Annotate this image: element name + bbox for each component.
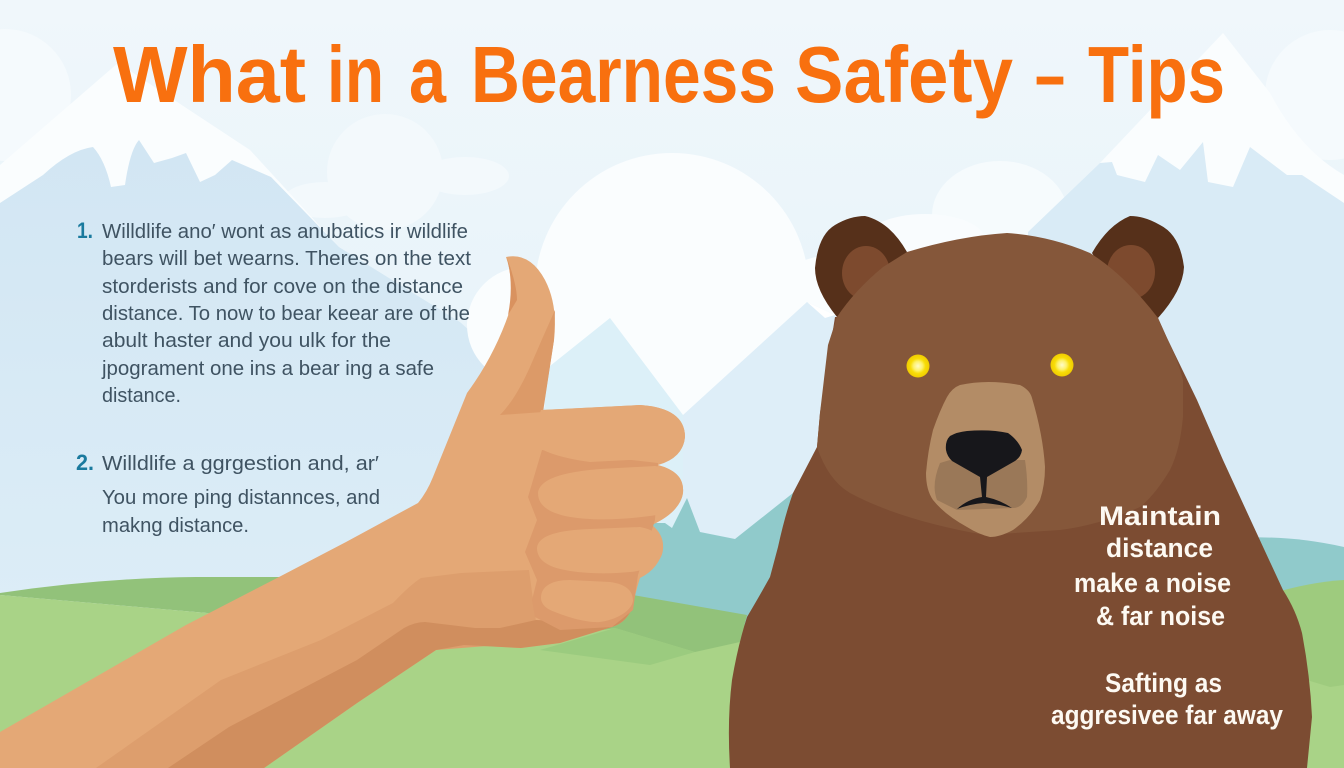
title [113, 30, 1225, 119]
title: Bearness [471, 30, 776, 119]
lower muzzle shade [935, 460, 1027, 510]
title: Tips [1088, 30, 1225, 119]
tip 1 text block: distance. [102, 384, 181, 407]
bear callout text: maintain distance: distance [1106, 533, 1213, 563]
tip 1 text block: distance. To now to bear keear are of the [102, 302, 470, 325]
title: – [1035, 30, 1065, 119]
tip 1 text block: Willdlife ano′ wont as anubatics ir wildlife [102, 220, 468, 243]
title: What [113, 30, 306, 119]
bear body [729, 317, 1312, 768]
bear callout text: safting: aggresivee far away [1051, 700, 1283, 730]
tip 1 text block: jpograment one ins a bear ing a safe [101, 357, 434, 380]
icon: thumbs up hand [0, 256, 685, 768]
title: a [409, 30, 446, 119]
tip 1 text block [77, 218, 471, 407]
background mountains and clouds [0, 29, 1344, 640]
tip 2 text block: makng distance. [102, 514, 249, 537]
icon: brown bear [729, 216, 1312, 768]
bear eye right [1050, 354, 1074, 376]
index finger [538, 405, 685, 462]
tip 1 text block: storderists and for cove on the distance [102, 275, 463, 298]
bear callout text: maintain distance: make a noise [1074, 568, 1231, 598]
bear callout text: safting: Safting as [1105, 668, 1222, 698]
bear nose [946, 430, 1022, 509]
tip 2 text block: You more ping distannces, and [102, 486, 380, 509]
bear callout text: maintain distance: Maintain [1099, 501, 1221, 531]
tip number 1: 1. [77, 218, 93, 243]
tip 1 text block: abult haster and you ulk for the [102, 329, 391, 352]
bear ears [815, 216, 1184, 318]
bear callout text: maintain distance [1074, 501, 1231, 631]
arm and palm [0, 256, 685, 768]
bear muzzle [926, 382, 1045, 537]
tip 1 text block: bears will bet wearns. Theres on the text [102, 247, 471, 270]
little finger [541, 580, 633, 622]
tip number 2: 2. [76, 450, 94, 475]
bear callout text: maintain distance: & far noise [1096, 601, 1225, 631]
arm underside shadow [96, 570, 536, 768]
ring finger [537, 527, 663, 573]
wrist darker edge [168, 605, 633, 768]
green hills [0, 577, 1344, 768]
title: in [327, 30, 384, 119]
tip 2 text block: Willdlife a ggrgestion and, ar′ [102, 452, 379, 475]
title: Safety [795, 30, 1013, 119]
bear callout text: safting [1051, 668, 1283, 730]
middle finger [538, 466, 683, 519]
bear head [817, 233, 1183, 535]
bear eye left [906, 354, 930, 378]
tip 2 text block [76, 450, 380, 537]
thumb shadow [500, 310, 555, 415]
finger gaps [525, 450, 658, 630]
